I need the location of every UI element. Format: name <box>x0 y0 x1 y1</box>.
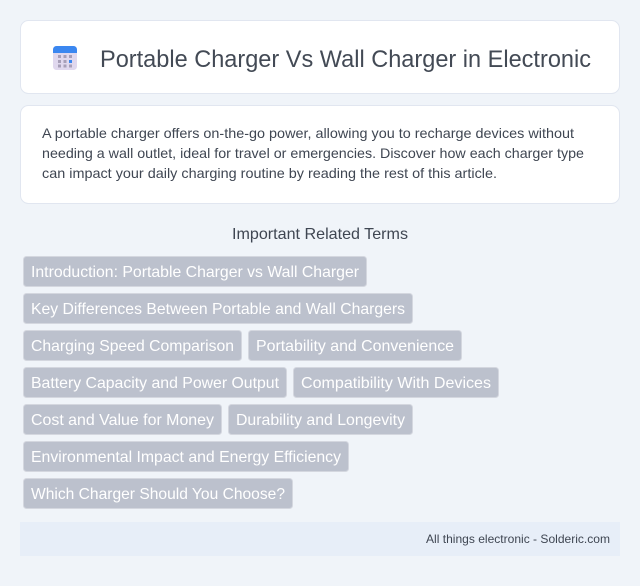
tag: cost <box>24 404 222 434</box>
tag: which charger: Which Charger Should You Choose? <box>31 486 285 503</box>
tag: introduction <box>24 256 366 286</box>
intro text: needing a wall outlet, ideal for travel or emergencies. Discover how each charger type <box>42 145 584 161</box>
intro text <box>42 125 584 181</box>
tag: portability: Portability and Convenience <box>256 338 454 355</box>
tag: durability: Durability and Longevity <box>236 412 405 429</box>
intro text: can impact your daily charging routine by reading the rest of this article. <box>42 165 497 181</box>
tag: charging speed: Charging Speed Comparison <box>31 338 234 355</box>
tag: key differences <box>24 294 412 324</box>
heading: related terms: Important Related Terms <box>232 226 408 243</box>
related terms tags <box>24 256 498 508</box>
intro card <box>20 106 620 204</box>
tag: battery capacity <box>24 368 286 398</box>
tag: key differences: Key Differences Between Portable and Wall Chargers <box>31 301 405 318</box>
tag: charging speed <box>24 330 242 360</box>
tag: cost: Cost and Value for Money <box>31 412 214 429</box>
tag: durability <box>228 404 412 434</box>
intro text: A portable charger offers on-the-go power, allowing you to recharge devices without <box>42 125 574 141</box>
icon: calendar <box>53 46 77 70</box>
tag: battery capacity: Battery Capacity and Power Output <box>31 375 280 392</box>
tag: portability <box>248 330 462 360</box>
footer <box>20 522 620 556</box>
tag: which charger <box>24 478 292 508</box>
footer: All things electronic - Solderic.com <box>426 532 610 546</box>
tag: environmental impact <box>24 442 348 472</box>
header card <box>20 20 620 94</box>
tag: compatibility <box>294 368 498 398</box>
tag: introduction: Introduction: Portable Charger vs Wall Charger <box>31 264 360 281</box>
tag: compatibility: Compatibility With Devices <box>301 375 491 392</box>
tag: environmental impact: Environmental Impact and Energy Efficiency <box>31 449 341 466</box>
title: Portable Charger Vs Wall Charger in Electronic <box>100 46 591 73</box>
